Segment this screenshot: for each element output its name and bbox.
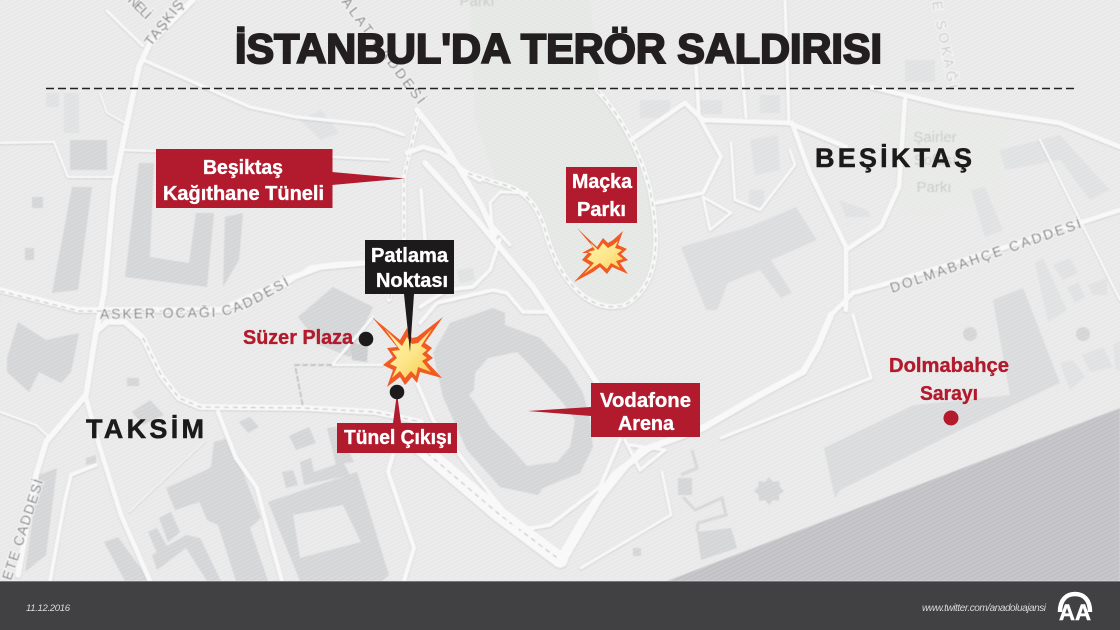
callout: Patlama Noktası: Noktası [376,270,448,292]
street name: Ete Caddesi: ETE CADDESİ [0,476,47,582]
stadium [433,308,593,495]
callout: Maçka Parkı [566,167,637,223]
water [667,408,1120,581]
park name: Şairler Sofası Parkı [913,129,957,196]
map background: ASKER OCAĞI CADDESİ [100,275,290,320]
dashed service road [295,365,332,407]
callout: Tünel Çıkışı [337,385,457,453]
callout: Maçka Parkı: Parkı [577,199,626,221]
street name: Dolmabahçe Caddesi: DOLMABAHÇE CADDESİ [887,214,1084,296]
icon: explosion Maçka Parkı [574,228,628,282]
footer bar [0,581,1120,630]
callout: Patlama Noktası: Patlama [371,245,449,267]
district label: Beşiktaş: BEŞİKTAŞ [815,143,972,173]
marker: Dolmabahçe Sarayı [889,355,1009,426]
callout: Maçka Parkı: Maçka [572,171,633,193]
park name: Şairler Sofası Parkı: Şairler [913,129,957,146]
title divider [46,88,1074,90]
callout: Beşiktaş Kağıthane Tüneli [156,149,405,208]
callout: Beşiktaş Kağıthane Tüneli: Kağıthane Tüneli [163,183,324,205]
street name: Sokağı: E SOKAĞI [929,0,962,91]
park areas [470,0,1010,307]
callout: Tünel Çıkışı: Tünel Çıkışı [344,427,452,449]
icon: explosion Patlama Noktası [372,317,443,387]
district label: Taksim: TAKSİM [86,414,204,444]
park name: Şairler Sofası Parkı: Sofası [914,152,956,169]
callout: Beşiktaş Kağıthane Tüneli: Beşiktaş [203,157,283,179]
callout: Vodafone Arena: Vodafone [600,390,691,412]
park name: Şairler Sofası Parkı: Parkı [916,179,952,196]
callout: Vodafone Arena [528,383,700,437]
icon: AA logo: AA [1059,600,1091,625]
street name: Asker Ocağı Caddesi [100,284,292,319]
callout: Patlama Noktası [365,240,454,352]
marker: Dolmabahçe Sarayı: Dolmabahçe [889,355,1009,377]
callout: Vodafone Arena: Arena [618,413,675,435]
title: İSTANBUL'DA TERÖR SALDIRISI [235,25,882,72]
date: 11.12.2016 [26,603,71,614]
marker: Süzer Plaza: Süzer Plaza [243,327,354,349]
source url: www.twitter.com/anadoluajansi [922,603,1047,614]
marker: Dolmabahçe Sarayı: Sarayı [920,383,978,405]
